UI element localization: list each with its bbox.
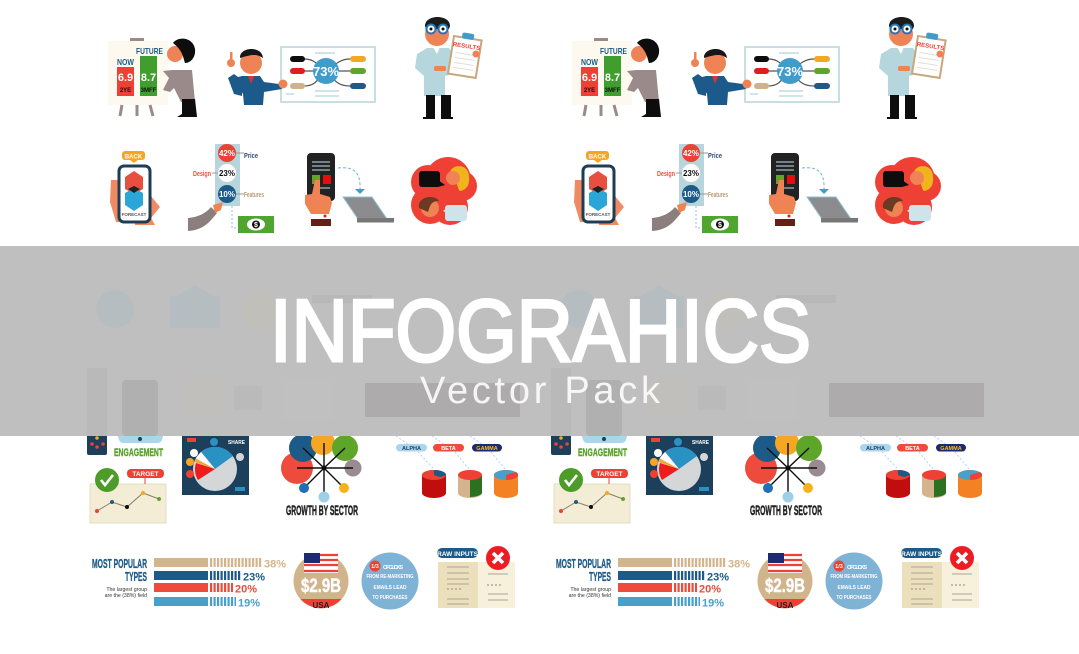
- phone forecast copy: [574, 151, 624, 225]
- price chart: 23%: [219, 169, 235, 178]
- presenter with mind map: 73%: [313, 64, 339, 79]
- usa value badge: [294, 553, 348, 610]
- presenter with mind map copy: 73%: [777, 64, 803, 79]
- most popular types bar chart copy: The largest group: [570, 587, 611, 593]
- click stat circle copy: EMAILS LEAD: [838, 585, 871, 591]
- cylinder charts: [396, 436, 518, 498]
- phone forecast: [110, 151, 160, 225]
- easel presenter: [108, 38, 197, 117]
- price chart: 42%: [219, 149, 235, 158]
- most popular types bar chart: 23%: [243, 572, 265, 584]
- click stat circle copy: 1/3: [835, 564, 843, 570]
- target line chart: [90, 468, 166, 523]
- share pie chart: SHARE: [228, 440, 245, 446]
- most popular types bar chart: TYPES: [125, 570, 147, 584]
- most popular types bar chart copy: 19%: [702, 598, 724, 610]
- easel presenter: 3MFF: [141, 88, 157, 94]
- click stat circle: 1/3: [371, 564, 379, 570]
- raw inputs checklist: [437, 546, 515, 608]
- share pie chart copy: SHARE: [692, 440, 709, 446]
- engagement icon: ENGAGEMENT: [114, 447, 163, 459]
- price chart: Features: [244, 192, 264, 199]
- click stat circle copy: TO PURCHASES: [836, 595, 872, 601]
- phone and laptop: [305, 153, 394, 226]
- price chart copy: Features: [708, 192, 728, 199]
- price chart: Price: [244, 153, 258, 160]
- most popular types bar chart: 19%: [238, 598, 260, 610]
- presenter with mind map copy: [691, 47, 839, 105]
- phone forecast copy: BACK: [589, 154, 607, 160]
- panel: right icon set: [551, 17, 982, 610]
- cylinder charts: BETA: [441, 446, 456, 452]
- chat bubble people copy: [875, 157, 941, 225]
- price chart copy: Design: [657, 171, 675, 178]
- engagement icon: [87, 434, 163, 459]
- click stat circle copy: [826, 552, 882, 610]
- click stat circle: [362, 552, 418, 610]
- price chart copy: $: [718, 222, 722, 229]
- most popular types bar chart copy: [556, 557, 750, 610]
- most popular types bar chart: [92, 557, 286, 610]
- click stat circle copy: OF CLICKS: [847, 565, 867, 571]
- panel: left icon set: [87, 17, 518, 610]
- grey title band: [0, 246, 1079, 436]
- price chart copy: 42%: [683, 149, 699, 158]
- target line chart: TARGET: [132, 471, 159, 478]
- price chart: Design: [193, 171, 211, 178]
- cylinder charts copy: GAMMA: [940, 446, 962, 452]
- phone and laptop copy: [769, 153, 858, 226]
- share pie chart copy: [646, 436, 713, 495]
- click stat circle: FROM RE-MARKETING: [366, 574, 414, 580]
- easel presenter copy: 2YE: [584, 88, 595, 94]
- click stat circle: EMAILS LEAD: [374, 585, 407, 591]
- growth by sector chart: GROWTH BY SECTOR: [286, 502, 358, 518]
- share pie chart: [182, 436, 249, 495]
- price chart copy: 10%: [683, 190, 699, 199]
- cylinder charts: ALPHA: [402, 446, 421, 452]
- growth by sector chart: [281, 431, 362, 518]
- most popular types bar chart copy: 38%: [728, 558, 750, 570]
- click stat circle copy: FROM RE-MARKETING: [830, 574, 878, 580]
- cylinder charts: GAMMA: [476, 446, 498, 452]
- raw inputs checklist copy: [901, 546, 979, 608]
- raw inputs checklist copy: RAW INPUTS: [901, 551, 943, 558]
- easel presenter copy: NOW: [581, 58, 598, 67]
- doctor with clipboard: [415, 17, 482, 119]
- presenter with mind map: [227, 47, 375, 105]
- phone forecast: BACK: [125, 154, 143, 160]
- most popular types bar chart: 38%: [264, 558, 286, 570]
- engagement icon copy: [551, 434, 627, 459]
- easel presenter: 6.9: [118, 72, 133, 84]
- usa value badge copy: $2.9B: [765, 576, 805, 597]
- easel presenter: 8.7: [141, 72, 156, 84]
- most popular types bar chart copy: are the (38%) field: [569, 593, 611, 599]
- price chart copy: Price: [708, 153, 722, 160]
- cylinder charts copy: ALPHA: [866, 446, 885, 452]
- usa value badge: USA: [313, 601, 330, 610]
- subtitle: Vector Pack: [420, 370, 661, 412]
- raw inputs checklist: RAW INPUTS: [437, 551, 479, 558]
- click stat circle: OF CLICKS: [383, 565, 403, 571]
- most popular types bar chart: 20%: [235, 584, 257, 596]
- most popular types bar chart: The largest group: [106, 587, 147, 593]
- easel presenter copy: 8.7: [605, 72, 620, 84]
- easel presenter copy: [572, 38, 661, 117]
- doctor with clipboard copy: [879, 17, 946, 119]
- target line chart copy: TARGET: [596, 471, 623, 478]
- usa value badge copy: [758, 553, 812, 610]
- easel presenter: FUTURE: [136, 46, 163, 56]
- most popular types bar chart copy: 23%: [707, 572, 729, 584]
- most popular types bar chart: are the (38%) field: [105, 593, 147, 599]
- most popular types bar chart copy: TYPES: [589, 570, 611, 584]
- doctor with clipboard: RESULTS: [452, 42, 480, 52]
- most popular types bar chart copy: MOST POPULAR: [556, 557, 611, 571]
- price chart: [188, 144, 274, 233]
- chat bubble people: [411, 157, 477, 225]
- most popular types bar chart copy: 20%: [699, 584, 721, 596]
- easel presenter copy: 3MFF: [605, 88, 621, 94]
- price chart copy: 23%: [683, 169, 699, 178]
- phone forecast copy: FORECAST: [586, 212, 611, 217]
- click stat circle: TO PURCHASES: [372, 595, 408, 601]
- engagement icon copy: ENGAGEMENT: [578, 447, 627, 459]
- phone forecast: FORECAST: [122, 212, 147, 217]
- easel presenter copy: 6.9: [582, 72, 597, 84]
- most popular types bar chart: MOST POPULAR: [92, 557, 147, 571]
- easel presenter: 2YE: [120, 88, 131, 94]
- price chart copy: [652, 144, 738, 233]
- easel presenter: NOW: [117, 58, 134, 67]
- growth by sector chart copy: GROWTH BY SECTOR: [750, 502, 822, 518]
- target line chart copy: [554, 468, 630, 523]
- usa value badge: $2.9B: [301, 576, 341, 597]
- usa value badge copy: USA: [777, 601, 794, 610]
- price chart: 10%: [219, 190, 235, 199]
- cylinder charts copy: BETA: [905, 446, 920, 452]
- growth by sector chart copy: [745, 431, 826, 518]
- price chart: $: [254, 222, 258, 229]
- title: INFOGRAHICS: [270, 281, 811, 380]
- ghosted icons behind band: [87, 285, 984, 436]
- easel presenter copy: FUTURE: [600, 46, 627, 56]
- doctor with clipboard copy: RESULTS: [916, 42, 944, 52]
- cylinder charts copy: [860, 436, 982, 498]
